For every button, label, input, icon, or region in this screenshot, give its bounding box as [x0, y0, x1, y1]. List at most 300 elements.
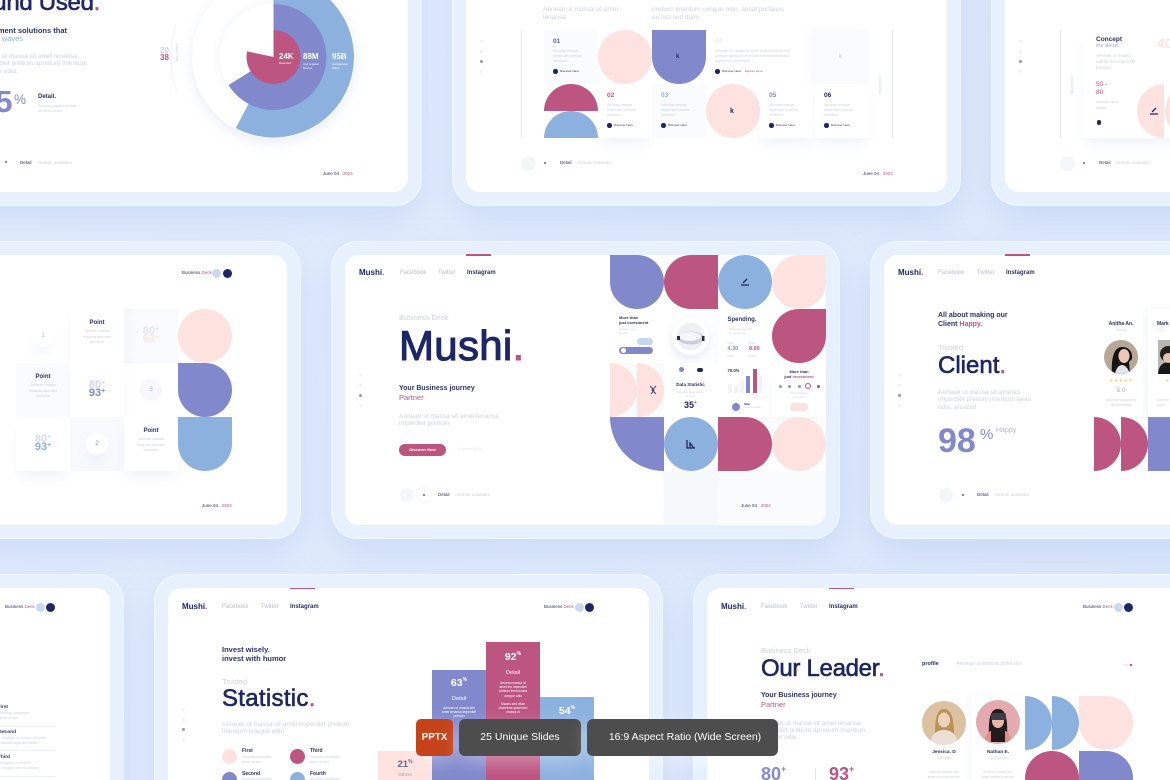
legend first: First: [242, 748, 253, 754]
shape blue circle: [664, 417, 718, 471]
eyebrow: Business Deck: [761, 646, 811, 655]
legend third: Third: [310, 748, 322, 754]
tile 05: imentum: [769, 113, 784, 117]
shape light pink circle: [772, 417, 826, 471]
spending card: • Marketing amount: [728, 327, 752, 331]
stat detail text: sit amet enen: [38, 108, 62, 112]
footer caption: Aenean uatiatiam: [577, 160, 612, 164]
cell numbers purple: [70, 363, 124, 417]
tile 03: Aenean massa: [661, 103, 686, 107]
body text: Aenean ut massa sit amet imperdiet pretium: [222, 721, 349, 728]
legend first: [222, 748, 272, 764]
nav links: Twitter: [438, 270, 456, 276]
profile caption: Aenean ut massa amet leo: [956, 661, 1021, 667]
circle shape: [178, 309, 232, 363]
cell number 2: [70, 417, 124, 471]
subtitle: Invest wisely.: [222, 645, 270, 654]
slide: Statistic: [154, 574, 663, 780]
cell point 2: [16, 363, 70, 417]
slide: Mushi cover: [331, 241, 840, 539]
tile 04: Explore Here: [745, 69, 763, 73]
subtitle: Client Happy.: [938, 321, 982, 328]
cell number 2: 2: [95, 440, 99, 447]
date: June 04 . 2024: [741, 503, 771, 508]
header toggle light: [574, 602, 584, 612]
year label: 20: [160, 46, 169, 55]
tagline: Your Business journey: [761, 692, 837, 699]
half circle pink: [1094, 417, 1121, 471]
slide: points grid: [0, 241, 301, 539]
concept panel: Aenean ut massa: [1096, 53, 1131, 58]
footer caption: Aenean uatiatiam: [37, 160, 72, 164]
half circle blue: [1025, 696, 1052, 750]
bar 54 percent: [540, 697, 594, 780]
body text: [761, 720, 865, 741]
divider 3: [0, 775, 55, 778]
tile icon: [815, 30, 869, 84]
circle pink: [1025, 751, 1079, 780]
legend third: amet lenan: [310, 760, 329, 764]
legend fourth: [290, 771, 340, 780]
logo: Mushi.: [359, 268, 384, 277]
half circle with icon: [1137, 84, 1164, 138]
stat detail: Detail.: [38, 94, 56, 100]
tile 03: 03: [661, 92, 668, 99]
slide: Around Used radial chart: [0, 0, 422, 206]
portrait Nathan: [976, 700, 1020, 744]
leader card Jessica: Jessica. D: [932, 750, 956, 754]
nav links: [761, 604, 856, 611]
button: [399, 444, 446, 456]
footer nav: [521, 156, 536, 171]
eyebrow: Trusted: [938, 343, 963, 352]
tile 01: imperdiet pretium: [553, 54, 582, 58]
teardrop purple: [1079, 751, 1133, 780]
header label: Business Deck: [182, 270, 212, 275]
slide: Around Used radial chart: Place: [332, 66, 340, 70]
mini card more than investment: just investment: [619, 320, 648, 325]
data statistic card: [664, 363, 718, 417]
nav links: Facebook: [938, 270, 964, 276]
slide: Around Used radial chart: And register: [303, 62, 319, 66]
footer dot: [1083, 162, 1085, 164]
nav links: Twitter: [977, 270, 995, 276]
body text: imentum congue odio: [222, 728, 284, 735]
legend first: amet lenan: [242, 760, 261, 764]
slide: Around Used radial chart: Device: [303, 66, 312, 70]
divider 2: [0, 749, 55, 752]
stat detail text: [38, 102, 77, 112]
side dots: [182, 708, 185, 741]
body text: Aenean ut massa sit amet lenansa: [761, 720, 861, 726]
subtitle accent: waves: [2, 34, 23, 43]
footer detail: Detail: [20, 160, 32, 164]
list second text: Aenean ut massa sit amet: [2, 736, 46, 740]
footer caption: Aenean uatiatiam: [994, 492, 1029, 496]
nav links: Twitter: [800, 604, 818, 610]
star: ★: [1165, 378, 1169, 384]
badge aspect ratio: 16:9 Aspect Ratio (Wide Screen): [609, 731, 761, 743]
slide: Around Used radial chart: 88M: [303, 52, 319, 61]
half domes pink and blue: [544, 84, 598, 138]
client card Anitha: Anitha An.: [1109, 321, 1133, 327]
concept panel: pretium: [1096, 65, 1111, 70]
bottom soft panel: [663, 471, 826, 525]
nav links: [222, 604, 319, 610]
cell point: pretiume: [90, 340, 104, 344]
tile 04: [706, 30, 815, 84]
spending card: Stat: [744, 402, 750, 406]
stat 98 percent: 98: [938, 422, 976, 460]
concept panel: 50 -: [1096, 81, 1107, 88]
percent sign: %: [14, 92, 26, 107]
more than investment right: [772, 363, 826, 417]
nav links: [938, 270, 1035, 276]
rotated axis label: Data Year: [175, 44, 180, 62]
cell numbers faint: 93+: [143, 333, 159, 345]
cell numbers blue: [16, 417, 70, 471]
client card second: Aenean: [1157, 398, 1169, 402]
shape pink half: [664, 255, 718, 309]
cell point: Aenean massa: [84, 329, 110, 333]
stat detail text: Aenean uatiae massa: [38, 102, 77, 108]
leader card Jessica: amet lenansa pentan: [928, 775, 960, 779]
intro text left: Aenean ut massa sit amet: [543, 6, 618, 13]
title: Client.: [938, 352, 1006, 379]
bar others 21 percent: Others: [398, 772, 412, 776]
U shape blue: [178, 417, 232, 471]
tile 04: ixamet leo imperdiet: [715, 59, 749, 63]
spending card: Data: [728, 354, 734, 358]
button: Discover Now: [409, 446, 436, 452]
tile 06: Aenean massa: [824, 103, 849, 107]
half circle blue: [1052, 696, 1079, 750]
legend second: Second: [242, 771, 260, 777]
nav links: Instagram: [290, 604, 319, 610]
tile 02: imperdiet pretium: [607, 108, 636, 112]
year label: [160, 46, 169, 62]
header label: Business Deck: [5, 604, 35, 608]
tile 06: imentum: [824, 113, 839, 117]
tile 05: Aenean massa: [769, 103, 794, 107]
concept panel: 80: [1096, 88, 1103, 96]
rating: 5.0: [1116, 387, 1126, 394]
body text: Aenean ut massa sit amet lenansa: [399, 412, 499, 420]
slide: concept: [991, 0, 1170, 206]
nav links: Twitter: [261, 604, 279, 610]
body text: [222, 721, 349, 735]
footer next: [417, 488, 431, 502]
bar 92 percent: congue odio: [504, 694, 522, 698]
side dots: [1019, 40, 1022, 73]
tile 06: 06: [824, 92, 831, 99]
bar 92 percent: sharetrus quismiros: [499, 706, 527, 710]
shape light pink: [772, 255, 826, 309]
tile 01: Discover Here: [560, 69, 579, 73]
footer caption: Aenean uatiatiam: [1115, 160, 1150, 164]
body text: [938, 389, 1031, 411]
half circle: [1165, 84, 1170, 138]
body text: imperdiet pretium imentum ueas: [938, 396, 1031, 403]
cell point 3: [124, 417, 178, 471]
leader card Nathan: [971, 696, 1025, 780]
cell numbers faint: 80+: [143, 325, 159, 337]
list third text: Ipsidyum imentum: [0, 761, 31, 765]
tile 06: Discover Here: [831, 123, 850, 127]
logo: Mushi.: [182, 602, 207, 610]
cell numbers blue: 93+: [35, 441, 51, 453]
header toggle dark: [1124, 602, 1132, 612]
circle icon pink: [706, 84, 760, 138]
nav indicator: [290, 588, 314, 589]
bar 92 percent: amet leo imperdiet: [499, 685, 527, 689]
nav links: Instagram: [1006, 270, 1035, 276]
side dots: [480, 40, 483, 73]
bar 92 percent: 92%: [505, 651, 521, 663]
explore link: Explore More: [459, 447, 482, 451]
cell point 3: Aenean massa: [138, 437, 164, 441]
radial chart: [170, 0, 357, 144]
legend first: Aenean uantasse: [242, 755, 272, 759]
cell point 3: pretiume: [144, 448, 158, 452]
chart labels: 24K: [279, 52, 294, 61]
footer nav: [5, 161, 7, 163]
mini card more than investment: More than: [619, 315, 638, 320]
header label: Business Deck: [544, 604, 574, 608]
spending card: 8.60: [749, 346, 760, 352]
data statistic card: Hamstramana sobrig: [678, 390, 703, 394]
bar 92 percent: [486, 642, 540, 780]
bar 63 percent: pretium: [454, 714, 464, 718]
subtitle: All about making our: [938, 312, 1008, 319]
tile 02: Discover Here: [614, 123, 633, 127]
bar 54 percent: 54%: [559, 705, 575, 717]
cell point: lenansa apentan: [83, 334, 111, 338]
client card Anitha: amet lenansa: [1110, 403, 1132, 407]
cell point 2: Point: [36, 374, 50, 380]
client card Anitha: Startup: [1115, 328, 1127, 332]
badge PPTX: [416, 719, 453, 756]
nav links: Facebook: [222, 604, 248, 610]
slide: list partial: [0, 574, 124, 780]
cell point 2: Aenean massa: [30, 383, 56, 387]
cell numbers purple: 93+: [89, 387, 105, 399]
header label: Business Deck: [1083, 604, 1113, 608]
nav links: [400, 270, 496, 276]
tile 04: Aenean ut massa sit amet lenansa imperdiet: [715, 49, 790, 53]
shape purple with icon: [652, 30, 706, 84]
body text: imperdiet pretium apretium imentum: [761, 727, 865, 734]
bar 92 percent: Aenean massa ut: [500, 681, 526, 685]
teardrop purple: [178, 363, 232, 417]
title: Our Leader.: [761, 655, 884, 682]
cell point 2: lenansa apentan: [29, 388, 57, 392]
header toggle dark: [584, 602, 594, 612]
spending card: 70.0%: [728, 368, 739, 373]
nav links: Facebook: [400, 270, 426, 276]
cell number 3: 3: [149, 386, 153, 393]
tile 06: imperdiet pretium: [824, 108, 853, 112]
side dots: [359, 374, 362, 407]
header toggle light: [212, 269, 221, 278]
concept panel: Aenean uiiana: [1096, 100, 1118, 104]
spending card: 4.30: [728, 346, 738, 352]
nav links: Instagram: [829, 604, 858, 610]
data statistic card: 35+: [684, 400, 697, 410]
leader card Nathan: amet lenansa pentan: [982, 775, 1014, 779]
portrait Anitha: [1104, 340, 1138, 374]
slide: Client: [870, 241, 1170, 539]
bar 92 percent: massa ut: [506, 710, 520, 714]
tile 03: Discover Here: [668, 123, 687, 127]
shape purple quarter: [610, 417, 664, 471]
slide: six points grid: [452, 0, 961, 206]
profile label: profile: [922, 661, 939, 667]
body text: odio, ansasst: [938, 404, 976, 411]
percent sign: %: [980, 426, 993, 443]
header toggle light: [36, 602, 44, 612]
data statistic card: Data Statistic: [676, 382, 705, 387]
list third text line 2: congue odio ut lorena: [1, 766, 38, 770]
tile 03: [652, 84, 706, 138]
circle icon pink: k: [730, 108, 734, 115]
vertical rule right: [892, 30, 893, 138]
slide: Our Leader: [693, 574, 1170, 780]
rotated label: productivity: [1070, 76, 1074, 94]
spending card: Aenean massa: [744, 406, 761, 408]
spending card: Data: [749, 341, 755, 345]
cell point: [70, 309, 124, 363]
footer detail: Detail: [438, 492, 450, 496]
cell point 3: Point: [144, 428, 158, 434]
bar 92 percent: pretium imentumea: [499, 689, 527, 693]
legend third: [290, 748, 340, 764]
happy label: Happy: [996, 427, 1016, 434]
half circles with icon: [610, 363, 664, 417]
tile 06: [815, 84, 869, 138]
concept panel: uamet leo imperdiet: [1096, 59, 1136, 64]
more than investment right: just investment: [784, 374, 814, 379]
leader card Jessica: Aenean massa sito: [929, 770, 959, 774]
bar 63 percent: amet lenansa imperdiet: [442, 710, 476, 714]
shape pink half: [718, 417, 772, 471]
tile 05: imperdiet pretium: [769, 108, 798, 112]
footer detail: Detail: [977, 492, 989, 496]
cell point 3: lenansa apentan: [137, 442, 165, 446]
tile icon: k: [839, 54, 842, 60]
bar others 21 percent: [378, 751, 432, 780]
more than investment right: Hamstramana: [790, 391, 808, 395]
body text: congue odio.: [761, 734, 798, 741]
badge unique slides: 25 Unique Slides: [480, 731, 560, 743]
divider 1: [0, 725, 55, 728]
hero title: Mushi.: [399, 322, 525, 368]
product image circle: [664, 309, 718, 363]
portrait second: [1158, 340, 1170, 374]
leader card Nathan: Aenean massa sito: [983, 770, 1013, 774]
tile 05: Discover Here: [776, 123, 795, 127]
leader card Nathan: Co-Founder: [988, 756, 1008, 760]
shape purple: [1148, 417, 1170, 471]
client card Anitha: Aenean massa uhy: [1106, 398, 1136, 402]
stars: ★★★★★: [1109, 378, 1133, 384]
nav indicator: [466, 254, 491, 256]
client card second: CEO: [1157, 328, 1165, 332]
tile 01: Aenean massa: [553, 49, 578, 53]
concept panel: the detail: [1096, 42, 1118, 48]
footer detail: Detail: [560, 160, 572, 164]
mini card more than investment: Aenean amet: [619, 327, 636, 331]
spending card: Data: [749, 354, 755, 358]
bar others 21 percent: 21%: [397, 759, 413, 770]
body text: Aenean ut massa sit ametas: [938, 389, 1020, 396]
bar 63 percent: Aenean ut massa sito: [443, 706, 475, 710]
cell point 2: pretiume: [36, 394, 50, 398]
more than investment right: lacunis: [795, 395, 803, 399]
intro text left: [543, 6, 618, 21]
tagline accent: Partner: [761, 700, 786, 709]
intro text right: eu nisl sed diam: [652, 14, 699, 21]
shape purple teardrop: [610, 255, 664, 309]
badge aspect ratio: [587, 719, 778, 756]
slide: Around Used radial chart: Detected: [279, 60, 291, 64]
tile 02: imentum: [607, 113, 622, 117]
side dots: [898, 374, 901, 407]
tile 01: [544, 30, 598, 84]
footer dot: [544, 162, 546, 164]
soft column: [664, 471, 718, 525]
mini card more than investment: [610, 309, 664, 363]
subtitle: [938, 312, 1008, 328]
tile 05: 05: [769, 92, 776, 99]
footer nav: [400, 488, 414, 502]
half circle pink: [1121, 417, 1148, 471]
vertical rule: [1060, 30, 1061, 138]
tile 05: [760, 84, 815, 138]
tile 01: 01: [553, 38, 560, 45]
client card Anitha: [1094, 309, 1148, 417]
bar 63 percent: [432, 670, 486, 780]
client card second: [1148, 309, 1170, 417]
shape blue circle with icon: [718, 255, 772, 309]
header toggle dark: [46, 602, 54, 612]
bar 92 percent: Mauris sed vitae: [501, 702, 525, 706]
nav links: Instagram: [467, 270, 496, 276]
cell numbers faint: [124, 309, 178, 363]
tile 02: 02: [607, 92, 614, 99]
spending card: • Hotel storage: [728, 331, 746, 335]
cell numbers purple: 80+: [89, 379, 105, 391]
arrow: [1123, 662, 1133, 668]
circle shape pink: [598, 30, 652, 84]
leader card Jessica: Founder: [937, 756, 951, 760]
nav indicator: [828, 588, 854, 589]
eyebrow: Business Deck: [399, 313, 449, 322]
eyebrow: Trusted: [222, 677, 247, 686]
footer detail: Detail: [1099, 160, 1111, 164]
leader card Jessica: [917, 696, 971, 780]
teardrop light pink: [1079, 696, 1133, 750]
rotated label: productivity: [878, 76, 882, 94]
spending card: Spending.: [728, 317, 756, 323]
vertical rule left: [520, 30, 522, 138]
slide: Around Used radial chart: 95B: [332, 52, 347, 61]
intro text right: pretium imentum congue odio, ansat portauris: [652, 6, 784, 13]
client card second: amet: [1157, 403, 1165, 407]
concept panel: Concept: [1096, 36, 1122, 43]
client card second: Mark: [1157, 321, 1169, 327]
tile 03: imentum: [661, 113, 676, 117]
